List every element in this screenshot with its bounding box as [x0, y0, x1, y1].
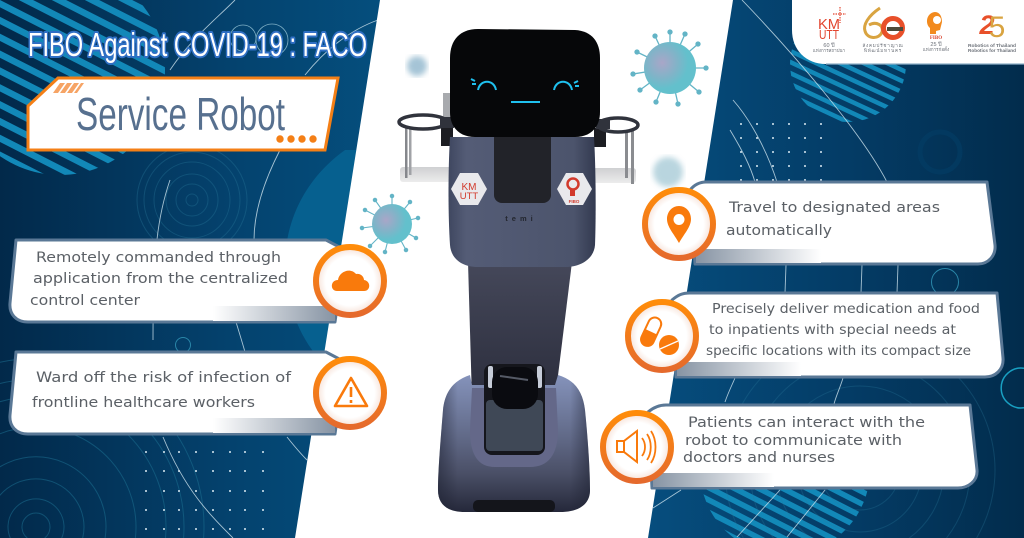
- logo: 25 years: Robotics for Thailand: [968, 48, 1016, 54]
- robot: tray shelves shadow: [400, 167, 636, 183]
- card text: Remotely commanded through: [36, 250, 281, 266]
- robot: KMUTT hexagon badge: KM: [462, 182, 476, 193]
- background: top-left striped circle: [0, 0, 170, 180]
- card text: Travel to designated areas: [728, 200, 940, 216]
- robot: face: [471, 79, 579, 102]
- robot: base vent: [473, 500, 555, 512]
- heading text: Service Robot: [76, 88, 285, 140]
- card text: robot to communicate with: [685, 433, 902, 449]
- card: travel: [690, 182, 995, 264]
- logo: 25 years: 2: [978, 10, 995, 40]
- background: lighter teal band: [288, 150, 356, 350]
- card text: [30, 250, 288, 309]
- logo: FIBO: FIBO: [930, 36, 942, 41]
- robot: FIBO hexagon badge: [557, 173, 592, 205]
- logo panel: [792, 0, 1024, 64]
- card text: to inpatients with special needs at: [709, 322, 956, 338]
- background: thin orbit lines: [153, 0, 898, 538]
- robot: column: [468, 262, 572, 400]
- virus: blurred right: [653, 157, 683, 187]
- card text: frontline healthcare workers: [32, 395, 255, 411]
- virus: blurred top left: [407, 56, 427, 76]
- background: top-right striped circle: [790, 42, 906, 122]
- logo: FIBO: 25 ปี: [930, 41, 942, 48]
- virus: top right: [631, 30, 708, 106]
- robot: left tray: [399, 93, 454, 178]
- heading dots: [276, 135, 317, 143]
- logo: 25 years: 5: [989, 11, 1005, 44]
- card shading: [653, 473, 774, 487]
- logo: FIBO: [923, 12, 949, 52]
- background: dot grid right: [740, 123, 822, 181]
- logo: 60 years: สังคมปรีชาญาณ: [862, 43, 904, 48]
- robot: KMUTT hexagon badge: UTT: [460, 191, 478, 202]
- background: concentric rings bottom right: [725, 335, 995, 538]
- background: dot grid left: [145, 451, 264, 530]
- card text: [32, 370, 292, 411]
- card text: automatically: [726, 223, 832, 239]
- card shading: [213, 306, 335, 321]
- title: FIBO Against COVID-19 : FACO: [28, 26, 367, 63]
- panel: service robot heading: [28, 78, 338, 150]
- card text: Ward off the risk of infection of: [36, 370, 292, 386]
- robot: camera cylinder: [488, 366, 542, 409]
- card text: [706, 301, 980, 359]
- card text: control center: [30, 293, 140, 309]
- logo: 60 years: พิพัฒน์มหานคร: [864, 47, 902, 53]
- logo: KMUTT: KM: [818, 16, 840, 33]
- card text: specific locations with its compact size: [706, 343, 971, 359]
- icon: location pin: [645, 190, 713, 258]
- robot: KMUTT hexagon badge: [451, 173, 487, 205]
- robot: shoulders: [448, 137, 596, 267]
- icon: pills: [628, 302, 696, 370]
- card: infection risk: [10, 352, 345, 434]
- logo: KMUTT: 60 ปี: [823, 42, 835, 49]
- robot: brand mark: temi: [505, 214, 537, 223]
- heading accent stripes: [53, 83, 84, 93]
- card shading: [677, 362, 801, 376]
- icon: speaker: [603, 413, 671, 481]
- card text: Precisely deliver medication and food: [712, 301, 980, 317]
- robot: base: [438, 375, 590, 512]
- card shading: [213, 418, 335, 433]
- icon: warning triangle: [316, 359, 384, 427]
- robot: base recess: [470, 388, 558, 467]
- card text: [726, 200, 940, 239]
- robot: right tray: [594, 118, 638, 184]
- logo: KMUTT: แห่งการสถาปนา: [813, 48, 846, 53]
- robot: [399, 29, 638, 512]
- robot: textured plate: [486, 400, 543, 451]
- virus: left of robot: [360, 194, 420, 254]
- centre white band: [295, 0, 733, 538]
- logo: KMUTT: [813, 7, 846, 53]
- robot: docking slot: [484, 364, 545, 455]
- robot: chest tab: [494, 130, 551, 203]
- card shading: [696, 249, 821, 263]
- card text: [683, 415, 925, 466]
- icon: cloud: [316, 247, 384, 315]
- card text: application from the centralized: [33, 271, 288, 287]
- robot: base edge shading: [438, 375, 590, 512]
- background: left navy area: [0, 0, 400, 538]
- robot: FIBO hexagon badge: FIBO: [569, 199, 580, 204]
- card: interact: [648, 405, 977, 488]
- logo: 25 years: Robotics of Thailand: [968, 43, 1016, 49]
- card text: Patients can interact with the: [688, 415, 925, 431]
- background: right navy area: [630, 0, 1024, 538]
- background: concentric rings centre left: [137, 145, 247, 255]
- logo: 60 years: [862, 8, 904, 53]
- card: remote command: [10, 240, 345, 322]
- logo: KMUTT: UTT: [819, 27, 839, 42]
- background: outline circles: [176, 24, 1024, 408]
- background: concentric rings bottom left: [0, 358, 204, 538]
- card text: doctors and nurses: [683, 450, 835, 466]
- logo: FIBO: แห่งการก่อตั้ง: [923, 46, 949, 52]
- background: bottom striped circle: [704, 490, 868, 538]
- robot: head screen: [450, 29, 600, 137]
- logo: 25 years: [968, 10, 1016, 54]
- card: deliver: [672, 293, 1003, 377]
